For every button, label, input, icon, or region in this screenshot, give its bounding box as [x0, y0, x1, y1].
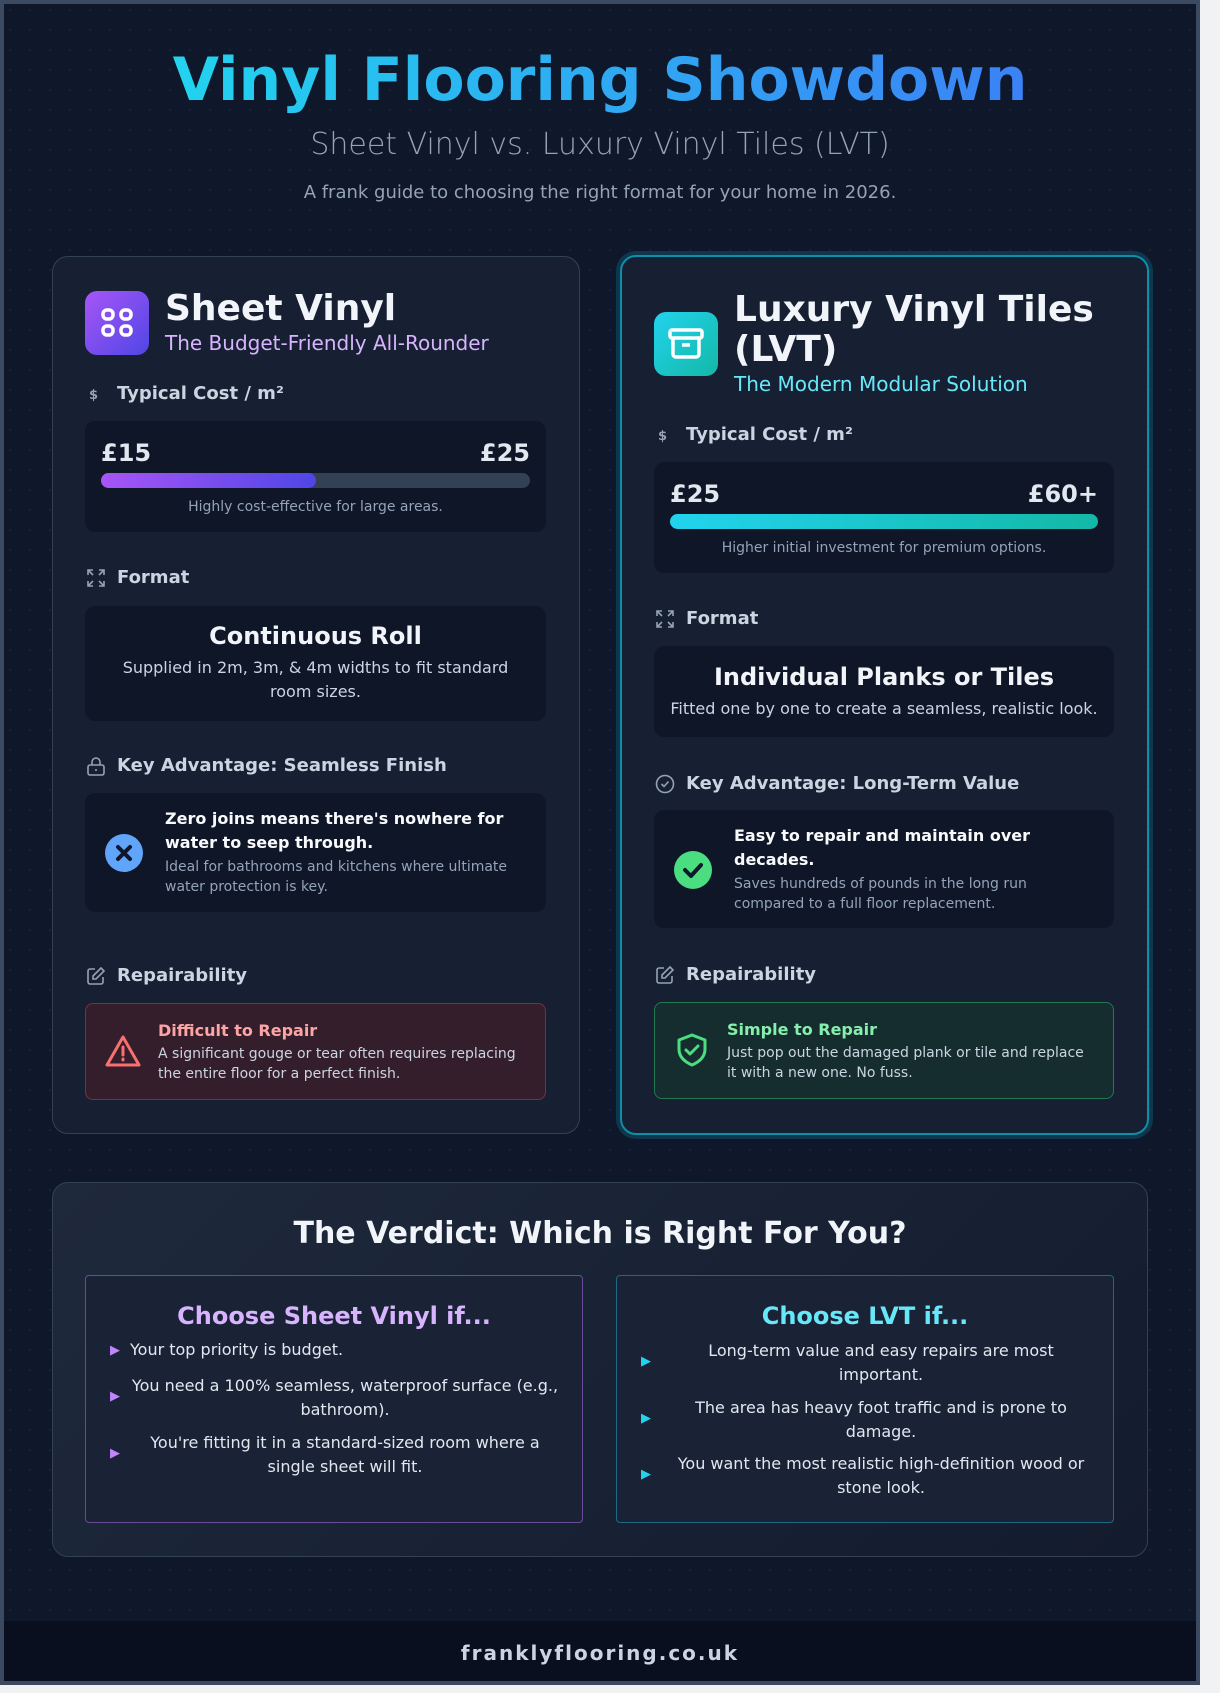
cost box [654, 462, 1114, 573]
icon: warning [105, 1035, 140, 1066]
cost box: Highly cost-effective for large areas. [188, 499, 443, 515]
icon: sheet vinyl [85, 291, 149, 355]
format heading: Format [686, 608, 758, 629]
format box [85, 606, 546, 721]
footer: franklyflooring.co.uk [461, 1641, 739, 1665]
cost heading: Typical Cost / m² [117, 383, 284, 404]
icon: check circle [674, 851, 712, 889]
cost box: £15 [101, 439, 151, 467]
repair box: difficult: A significant gouge or tear often requires replacing the entire floor for a perfect finish. [158, 1046, 516, 1082]
verdict: sheet vinyl: You're fitting it in a standard-sized room where a single sheet will fit. [150, 1433, 540, 1476]
text: $ [658, 429, 667, 444]
advantage box [85, 793, 546, 912]
subheading: The Modern Modular Solution [734, 372, 1028, 396]
advantage box: Ideal for bathrooms and kitchens where ultimate water protection is key. [165, 859, 507, 895]
verdict: LVT: ▶ [641, 1467, 651, 1482]
footer [0, 1621, 1200, 1685]
format box: Fitted one by one to create a seamless, realistic look. [670, 699, 1098, 718]
repair box: simple: Simple to Repair [727, 1020, 877, 1039]
verdict: sheet vinyl: ▶ [110, 1446, 120, 1461]
cost box [85, 421, 546, 532]
verdict: LVT: Long-term value and easy repairs are most important. [708, 1341, 1054, 1384]
verdict title: The Verdict: Which is Right For You? [293, 1216, 907, 1251]
advantage box [654, 810, 1114, 928]
repair box: difficult: Difficult to Repair [158, 1021, 317, 1040]
panel: verdict [52, 1182, 1148, 1557]
verdict: LVT: Choose LVT if... [762, 1302, 968, 1330]
format heading: Format [117, 567, 189, 588]
advantage box: Saves hundreds of pounds in the long run compared to a full floor replacement. [734, 876, 1027, 912]
text: $ [89, 388, 98, 403]
heading: LVT: Luxury Vinyl Tiles [734, 289, 1094, 330]
heading: LVT [734, 289, 1094, 370]
heading: sheet vinyl: Sheet Vinyl [165, 288, 396, 329]
key advantage heading: Key Advantage: Seamless Finish [117, 755, 447, 776]
verdict: LVT: You want the most realistic high-definition wood or stone look. [678, 1454, 1084, 1497]
verdict: sheet vinyl: ▶ [110, 1343, 120, 1358]
tagline: A frank guide to choosing the right format for your home in 2026. [304, 182, 896, 203]
verdict: LVT: The area has heavy foot traffic and is prone to damage. [695, 1398, 1067, 1441]
cost box: Higher initial investment for premium options. [722, 540, 1046, 556]
verdict: LVT: ▶ [641, 1354, 651, 1369]
icon: x circle [105, 834, 143, 872]
panel: sheet vinyl [52, 256, 580, 1134]
repairability heading: Repairability [117, 965, 247, 986]
format box: Individual Planks or Tiles [714, 663, 1054, 691]
repair box: difficult [85, 1003, 546, 1100]
format box: Continuous Roll [209, 622, 422, 650]
panel: LVT [620, 255, 1149, 1135]
key advantage heading: Key Advantage: Long-Term Value [686, 773, 1019, 794]
format box: Supplied in 2m, 3m, & 4m widths to fit standard room sizes. [123, 658, 508, 701]
advantage box: Zero joins means there's nowhere for water to seep through. [165, 809, 503, 852]
repair box: simple: Just pop out the damaged plank or tile and replace it with a new one. No fuss. [727, 1045, 1084, 1081]
advantage box: Easy to repair and maintain over decades. [734, 826, 1030, 869]
cost box: £60+ [1028, 480, 1098, 508]
repair box: simple [654, 1002, 1114, 1099]
cost heading: Typical Cost / m² [686, 424, 853, 445]
icon: LVT [654, 312, 718, 376]
subheading: The Budget-Friendly All-Rounder [165, 331, 489, 355]
subtitle: Sheet Vinyl vs. Luxury Vinyl Tiles (LVT) [310, 127, 890, 162]
cost box: £25 [480, 439, 530, 467]
icon: shield [678, 1034, 706, 1066]
verdict: sheet vinyl [85, 1275, 583, 1523]
verdict: LVT [616, 1275, 1114, 1523]
repairability heading: Repairability [686, 964, 816, 985]
cost box: £25 [670, 480, 720, 508]
verdict: sheet vinyl: Your top priority is budget. [130, 1340, 343, 1359]
verdict: sheet vinyl: You need a 100% seamless, waterproof surface (e.g., bathroom). [132, 1376, 558, 1419]
format box [654, 646, 1114, 737]
heading: LVT: (LVT) [734, 329, 837, 370]
verdict: sheet vinyl: Choose Sheet Vinyl if... [177, 1302, 491, 1330]
verdict: sheet vinyl: ▶ [110, 1389, 120, 1404]
title: Vinyl Flooring Showdown [173, 45, 1027, 115]
verdict: LVT: ▶ [641, 1411, 651, 1426]
